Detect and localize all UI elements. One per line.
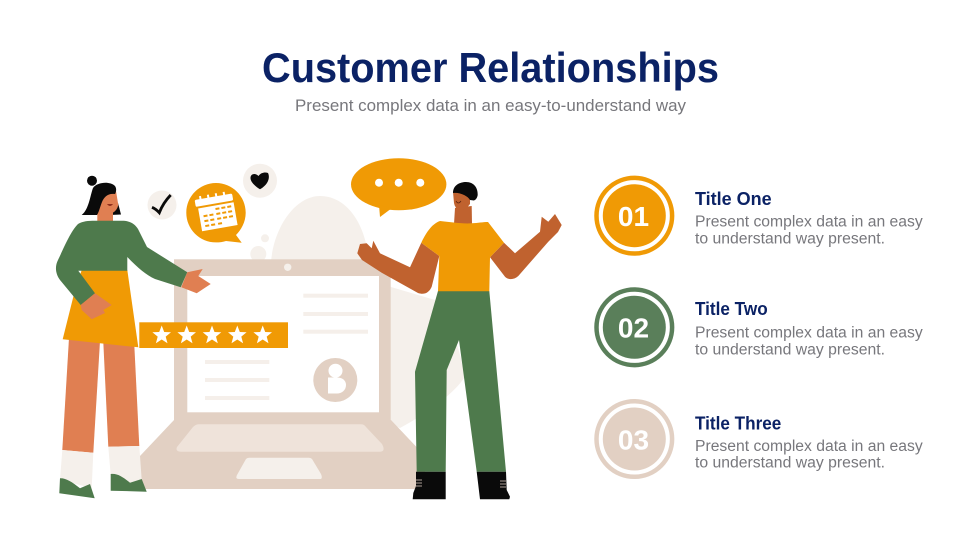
description: to understand way present. (695, 341, 885, 358)
man figure (357, 182, 562, 499)
left arm (357, 241, 439, 294)
smile (107, 204, 113, 206)
right boot laces (500, 481, 506, 487)
right sock (108, 446, 142, 484)
text lines right (303, 294, 368, 334)
heart badge (243, 164, 277, 198)
item 3 (596, 401, 923, 477)
pants (415, 291, 506, 472)
badge 02: 02 (618, 312, 649, 344)
badge 01: 01 (618, 201, 649, 232)
laptop screen frame (174, 259, 391, 422)
right shoe (111, 474, 147, 492)
heading: Title One (695, 188, 772, 209)
t-shirt (421, 221, 504, 291)
hair (82, 183, 116, 215)
background blob (250, 196, 464, 428)
profile icon (313, 358, 357, 402)
touchpad (236, 458, 322, 479)
calendar bubble (186, 183, 246, 243)
woman figure (56, 176, 211, 498)
left leg (62, 338, 100, 453)
skirt (63, 270, 138, 347)
hair (453, 182, 478, 200)
camera dot (284, 264, 291, 271)
hair bun (87, 176, 97, 186)
description: to understand way present. (695, 455, 885, 472)
outstretched hand (181, 269, 211, 293)
right boot (477, 472, 510, 499)
hand on hip (81, 293, 112, 319)
laptop base (140, 420, 425, 489)
badge 03 (596, 401, 672, 477)
badge 01 (596, 178, 672, 254)
face (453, 192, 470, 210)
badge 03: 03 (618, 424, 649, 455)
badge 02 (596, 290, 672, 365)
laptop screen (187, 276, 379, 412)
description: to understand way present. (695, 230, 885, 247)
left sock (60, 450, 93, 488)
speech bubble (351, 158, 446, 217)
description: Present complex data in an easy (695, 324, 923, 341)
title: Customer Relationships (262, 44, 719, 91)
keyboard (176, 424, 384, 452)
calendar icon (194, 190, 238, 232)
neck (97, 208, 113, 223)
hair right flap (110, 203, 121, 215)
laptop (140, 259, 425, 489)
sweater (56, 221, 187, 305)
left boot laces (416, 480, 422, 486)
left shoe (59, 478, 95, 498)
check badge (148, 190, 176, 220)
neck (454, 206, 472, 224)
subtitle: Present complex data in an easy-to-understand way (295, 96, 686, 115)
item 1 (596, 178, 923, 254)
smile (456, 201, 461, 203)
rating bar (139, 322, 288, 348)
description: Present complex data in an easy (695, 438, 923, 455)
face (97, 191, 118, 215)
heading: Title Two (695, 298, 768, 319)
text lines left (205, 360, 269, 400)
left boot (413, 472, 446, 499)
heading: Title Three (695, 412, 781, 433)
description: Present complex data in an easy (695, 214, 923, 231)
right arm (490, 214, 562, 279)
item 2 (596, 290, 923, 365)
right leg (103, 342, 139, 447)
